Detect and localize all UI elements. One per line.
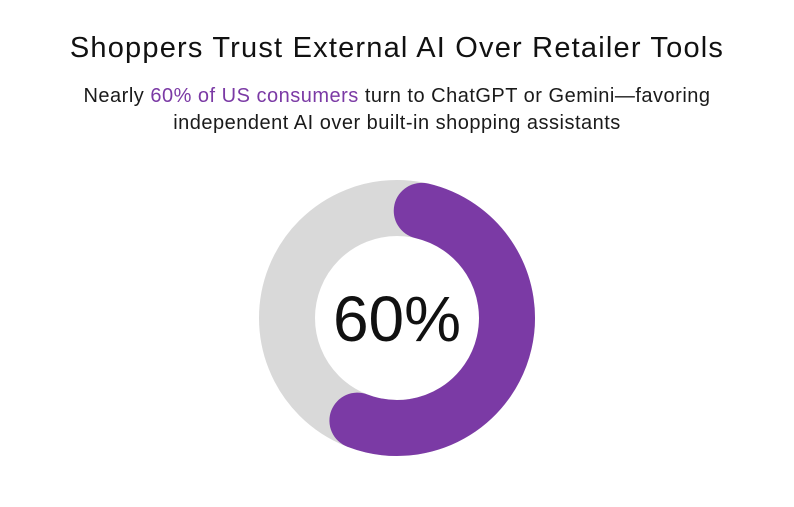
subtitle: Nearly 60% of US consumers turn to ChatGPT or Gemini—favoring — [83, 85, 711, 107]
title: Shoppers Trust External AI Over Retailer Tools — [70, 32, 724, 64]
subtitle: independent AI over built-in shopping assistants — [173, 112, 621, 134]
center value: 60% — [333, 283, 461, 355]
donut value arc — [265, 186, 529, 450]
donut track — [287, 208, 507, 428]
subtitle — [83, 85, 711, 134]
